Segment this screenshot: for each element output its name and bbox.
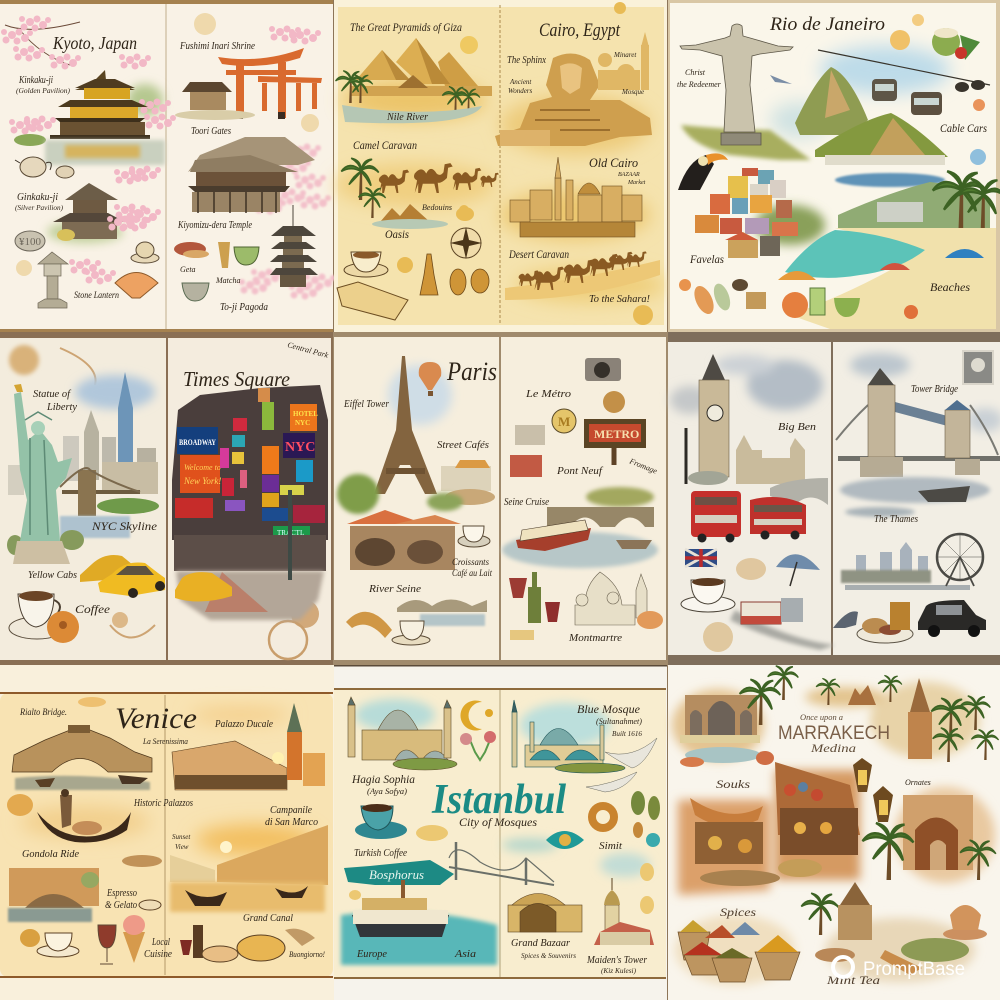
icon: crescent moon and star — [460, 700, 493, 731]
panel: Istanbul — [334, 665, 667, 1000]
icon: Nile River — [342, 105, 482, 123]
label: Local Cuisine: Local — [151, 937, 170, 948]
icon: stone lantern — [38, 252, 68, 308]
panel: Venice — [0, 665, 334, 1000]
label: Ornates: Ornates — [905, 778, 931, 787]
icon: metro sign — [584, 391, 646, 465]
icon: coffee and donut — [9, 591, 79, 643]
taxi — [175, 572, 232, 602]
icon: 100 yen coin: ¥100 — [19, 236, 42, 248]
sign: Hotel NYC: NYC — [295, 419, 310, 427]
icon: market scene — [801, 882, 872, 940]
label: Fromage: Fromage — [627, 456, 659, 476]
label: Kinkaku-ji — [16, 75, 71, 95]
label: Desert Caravan: Desert Caravan — [508, 247, 569, 261]
label: Grand Canal: Grand Canal — [243, 913, 293, 924]
icon: Ginkaku-ji silver pavilion — [47, 183, 161, 243]
label: Spices: Spices — [720, 905, 756, 919]
icon: Houses of Parliament — [688, 435, 805, 485]
icon: torii gates — [218, 48, 322, 119]
label: Ancient Wonders: Ancient — [509, 78, 532, 86]
icon: metro M medallion: M — [558, 414, 570, 429]
icon: 100 yen coin — [15, 231, 45, 251]
icon: street wash — [730, 610, 835, 650]
label: Statue of Liberty — [33, 389, 78, 413]
icon: salad and bread — [880, 938, 969, 975]
icon: palm grove — [931, 696, 999, 762]
label: Statue of Liberty: Statue of — [33, 389, 71, 400]
icon: coconut — [932, 28, 980, 60]
icon: camera — [585, 358, 621, 381]
icon: tagine teapot — [943, 905, 987, 940]
icon: geta sandals — [174, 242, 209, 258]
label: River Seine: River Seine — [368, 584, 422, 595]
icon: coffee stain bottom — [703, 622, 733, 652]
icon: souk stall right — [775, 762, 860, 855]
label: Le Metro: Le Métro — [525, 389, 571, 400]
icon: Blue Mosque — [512, 700, 625, 773]
icon: floral splash — [637, 611, 663, 629]
watermark: PromptBase — [833, 957, 965, 980]
icon: Old Cairo city — [510, 157, 642, 237]
icon: Maiden's Tower — [594, 878, 654, 945]
icon: river bank — [841, 570, 970, 590]
icon: souk stall left — [695, 822, 763, 864]
icon: tea bowl — [182, 283, 209, 301]
icon: cup and saucer — [392, 621, 430, 645]
label: Kinkaku-ji: Kinkaku-ji — [18, 75, 53, 86]
icon: pink blossom sprig — [69, 258, 116, 284]
icon: folding fan — [115, 272, 158, 298]
icon: favela houses — [695, 168, 825, 258]
icon: flip-flops — [690, 281, 733, 317]
label: Maiden's Tower: Maiden's Tower — [586, 955, 647, 966]
panel: New York — [0, 332, 333, 666]
label: Seine Cruise: Seine Cruise — [504, 497, 549, 508]
icon: Kiyomizu-dera temple — [188, 137, 315, 213]
label: Espresso & Gelato: Espresso — [106, 888, 137, 899]
text: Paris title: Paris — [446, 357, 497, 386]
icon: cherry branch right — [269, 26, 321, 44]
label: Historic Palazzos: Historic Palazzos — [133, 798, 193, 809]
icon: tulips — [460, 731, 496, 760]
icon: London Eye — [937, 534, 983, 586]
label: Grand Bazaar: Grand Bazaar — [511, 938, 570, 949]
icon: matcha bowl — [234, 247, 259, 265]
label: Camel Caravan: Camel Caravan — [353, 138, 417, 152]
icon: pagoda — [270, 205, 318, 287]
icon: mask — [122, 855, 162, 867]
sign: Welcome to New York: Welcome to — [184, 463, 221, 472]
label: Kinkaku-ji: (Golden Pavilion) — [16, 87, 71, 95]
label: Europe, Asia: Europe — [356, 949, 388, 960]
illustration: Times Square street — [172, 385, 328, 620]
icon: Eiffel Tower — [374, 356, 437, 494]
icon: matcha whisk — [218, 242, 230, 268]
sign: Broadway: BROADWAY — [179, 438, 216, 447]
icon: ferry — [352, 880, 449, 937]
icon: Campanile tower — [272, 703, 325, 786]
sign: NYC — [283, 433, 315, 458]
label: Hagia Sophia: (Aya Sofya) — [367, 787, 407, 796]
icon: Koutoubia tower — [908, 678, 932, 759]
text: Istanbul title: Istanbul — [431, 777, 566, 823]
label: Statue of Liberty: Liberty — [46, 402, 78, 413]
icon: riad courtyard — [680, 695, 774, 767]
icon: parchment scroll — [337, 282, 408, 320]
label: Blue Mosque: (Sultanahmet) — [596, 717, 642, 726]
panel: Kyoto, Japan — [0, 0, 336, 333]
panel: Rio de Janeiro — [668, 0, 1000, 332]
label: Central Park: Central Park — [286, 340, 330, 360]
label: Espresso & Gelato — [105, 888, 137, 911]
icon: desert caravan — [505, 251, 660, 300]
label: Local Cuisine — [144, 937, 173, 960]
icon: Turkish coffee cup — [355, 804, 407, 839]
label: Bazaar Market — [618, 172, 646, 186]
icon: hanging lanterns — [853, 758, 893, 822]
label: Espresso & Gelato: & Gelato — [105, 900, 137, 911]
sign: NYC: NYC — [285, 440, 315, 455]
icon: full English breakfast — [857, 618, 913, 643]
sign: Hotel NYC — [290, 404, 318, 431]
icon: Thames water — [840, 477, 990, 517]
icon: pint of beer — [890, 602, 910, 630]
icon: metro M medallion — [552, 409, 576, 433]
icon: Westminster bridge — [770, 478, 828, 505]
icon: hot-air balloon — [419, 362, 441, 396]
label: Simit: Simit — [599, 841, 622, 852]
icon: pigeon — [833, 611, 858, 628]
icon: street kiosk and scooter — [510, 425, 545, 477]
panel: Cairo, Egypt — [334, 0, 667, 334]
icon: Doge's Palace — [172, 741, 287, 790]
icon: Thames tour boat — [918, 486, 970, 502]
label: Campanile di San Marco — [265, 805, 318, 828]
label: Europe, Asia: Asia — [454, 949, 476, 960]
icon: food and wine table — [180, 925, 315, 962]
icon: Tower Bridge — [836, 368, 1000, 477]
sign: Hotel NYC: HOTEL — [293, 410, 318, 418]
icon: sky wash — [388, 365, 452, 425]
icon: wine glass — [98, 925, 116, 964]
label: Maiden's Tower: (Kiz Kulesi) — [601, 967, 637, 975]
icon: coffee and sundae — [20, 929, 79, 957]
icon: lamp post — [684, 428, 688, 484]
icon: Rialto Bridge — [12, 725, 152, 790]
text: Medina: Medina — [810, 741, 856, 755]
icon: small shrine — [175, 82, 255, 120]
icon: beach umbrellas — [778, 249, 984, 280]
icon: oasis palms — [341, 158, 430, 222]
label: Buongiorno: Buongiorno! — [289, 950, 325, 959]
label: Ginkaku-ji — [15, 192, 64, 212]
label: Hagia Sophia — [351, 772, 415, 796]
icon: stains — [16, 13, 319, 276]
icon: simit — [592, 806, 614, 828]
icon: Seine water — [502, 532, 658, 568]
icon: trees — [337, 474, 463, 514]
label: Sunset View — [172, 833, 191, 851]
sign: Broadway — [177, 427, 218, 454]
icon: Sugarloaf mountains — [795, 67, 948, 165]
icon: Bosphorus Bridge — [449, 842, 554, 885]
icon: pyramids — [350, 38, 492, 96]
panel: Marrakech — [668, 665, 1000, 1000]
label: Blue Mosque — [577, 702, 642, 738]
label: Oasis: Oasis — [385, 227, 409, 241]
text: Marrakech subtitle: Once upon a — [800, 713, 843, 722]
sign: street sign: TRACTL — [277, 529, 304, 537]
pole — [288, 490, 292, 580]
icon: domed dish — [131, 242, 159, 263]
label: Gondola Ride: Gondola Ride — [22, 849, 80, 860]
icon: Sphinx — [495, 53, 652, 146]
icon: Christ the Redeemer — [680, 24, 793, 145]
label: Bazaar Market: BAZAAR — [618, 172, 640, 178]
icon: metro sign: METRO — [594, 427, 639, 441]
icon: Bosphorus banner — [344, 860, 454, 885]
label: Nile River: Nile River — [386, 112, 428, 123]
icon: Grand Canal buildings — [170, 825, 328, 912]
icon: compass — [450, 227, 482, 259]
label: Maiden's Tower — [586, 955, 647, 975]
icon: small plates — [815, 948, 855, 962]
label: To the Sahara: To the Sahara! — [589, 294, 650, 305]
icon: Big Ben — [699, 354, 729, 477]
icon: black cab — [918, 600, 986, 637]
icon: camel caravan — [379, 163, 499, 193]
icon: spice baskets — [678, 920, 800, 982]
label: Minaret, Mosque: Minaret — [613, 51, 637, 59]
icon: vintage coach — [741, 598, 803, 624]
sign: neon sign wall — [175, 418, 325, 523]
label: Tower Bridge: Tower Bridge — [911, 384, 958, 395]
icon: Pont Neuf bridge — [547, 487, 654, 527]
icon: Sacre-Coeur Montmartre — [575, 572, 647, 625]
label: Christ the Redeemer: Christ — [685, 68, 706, 77]
icon: oasis pond — [372, 219, 448, 229]
icon: beach sand — [790, 228, 996, 329]
label: Bedouins: Bedouins — [422, 203, 452, 212]
icon: Paris street buildings — [441, 460, 495, 505]
icon: palm by gate — [862, 823, 914, 880]
label: Blue Mosque: Blue Mosque — [577, 702, 641, 716]
label: Big Ben: Big Ben — [778, 422, 816, 433]
icon: gondola and gondolier — [37, 789, 131, 842]
panel: Paris — [333, 332, 668, 666]
text: Kyoto title: Kyoto, Japan — [52, 33, 137, 53]
icon: palms top — [740, 666, 902, 725]
icon: Seine cruise boat — [516, 520, 591, 551]
icon: small boat — [616, 540, 652, 549]
label: Croissants, Cafe au Lait: Café au Lait — [452, 568, 492, 578]
label: Fushimi Inari Shrine: Fushimi Inari Shrine — [179, 41, 255, 52]
icon: plum blossom sprig — [114, 166, 161, 184]
label: Rialto Bridge: Rialto Bridge. — [19, 707, 67, 717]
icon: cafe terrace — [347, 510, 461, 570]
label: The Thames: The Thames — [874, 514, 918, 525]
icon: coffee cup small — [139, 900, 161, 910]
icon: stains — [679, 14, 988, 312]
icon: Hagia Sophia — [348, 697, 457, 770]
icon: sunglasses — [955, 80, 985, 92]
icon: gondolas on Grand Canal — [185, 886, 308, 906]
label: Beaches: Beaches — [930, 280, 970, 294]
label: Minaret, Mosque: Mosque — [621, 88, 644, 96]
icon: evil eye — [546, 831, 584, 849]
icon: cable cars — [818, 50, 990, 115]
icon: cup — [458, 526, 490, 547]
watermark: PromptBase: PromptBase — [863, 959, 965, 980]
icon: seagulls — [586, 738, 657, 792]
icon: coffee stains — [9, 345, 319, 659]
label: Turkish Coffee: Turkish Coffee — [354, 848, 407, 859]
label: Ancient Wonders: Wonders — [508, 87, 533, 95]
icon: hillside under statue — [681, 125, 811, 160]
icon: red double-decker buses — [691, 491, 806, 542]
label: Croissants, Cafe au Lait — [452, 557, 492, 578]
label: Ginkaku-ji: (Silver Pavilion) — [15, 204, 64, 212]
label: Europe, Asia — [356, 949, 476, 960]
icon: yellow cabs — [80, 555, 165, 598]
icon: coffee cup — [344, 252, 388, 277]
text: Rio title: Rio de Janeiro — [769, 14, 885, 35]
label: Geta, Matcha, To-ji Pagoda: Geta — [180, 265, 196, 274]
icon: market awning — [690, 798, 763, 826]
icon: coffee cup — [681, 578, 735, 612]
icon: resort hills and palms — [838, 171, 1000, 232]
icon: tropical fruit and drinks — [732, 279, 918, 319]
label: Christ the Redeemer: the Redeemer — [677, 80, 722, 89]
icon: palm right — [960, 840, 996, 880]
icon: Brooklyn Bridge — [60, 468, 159, 538]
label: Pont Neuf: Pont Neuf — [556, 466, 603, 477]
text: Great Pyramids heading: The Great Pyramids of Giza — [350, 20, 462, 34]
label: Toori Gates: Toori Gates — [191, 126, 231, 137]
label: Cable Cars: Cable Cars — [940, 121, 987, 135]
label: Sunset View: View — [175, 843, 189, 851]
label: Geta, Matcha, To-ji Pagoda: To-ji Pagoda — [220, 302, 268, 313]
label: Geta, Matcha, To-ji Pagoda: Matcha — [215, 276, 240, 285]
label: Palazzo Ducale: Palazzo Ducale — [214, 719, 274, 730]
icon: Turkish lanterns — [631, 791, 660, 847]
label: Montmartre: Montmartre — [568, 633, 623, 644]
icon: wine and cheese — [509, 572, 560, 640]
icon: city skyline — [856, 542, 928, 580]
label: Blue Mosque: Built 1616 — [612, 730, 642, 738]
label: La Serenissima: La Serenissima — [142, 737, 188, 746]
label: Kiyomizu-dera Temple: Kiyomizu-dera Temple — [177, 220, 252, 231]
text: Cairo title: Cairo, Egypt — [539, 20, 621, 41]
icon: gelato cone — [123, 915, 145, 963]
icon: ocean — [785, 230, 925, 278]
icon: palm trees by the Nile — [336, 71, 480, 115]
icon: hookah and pots — [420, 254, 489, 295]
icon: distant kasbah — [848, 685, 876, 705]
label: Spices & Souvenirs: Spices & Souvenirs — [521, 952, 576, 960]
label: Hagia Sophia: Hagia Sophia — [351, 772, 415, 786]
icon: Union Jack — [685, 549, 717, 567]
icon: toucan — [678, 153, 728, 190]
label: Sunset View: Sunset — [172, 833, 191, 841]
wet street — [176, 571, 324, 620]
label: Bazaar Market: Market — [627, 180, 646, 186]
icon: teapot and bowl — [15, 157, 74, 178]
icon: Kinkaku-ji golden pavilion — [9, 70, 176, 165]
label: Stone Lantern: Stone Lantern — [74, 290, 119, 300]
sign: Welcome to New York — [180, 455, 221, 493]
sign: street sign — [273, 526, 310, 538]
icon: bay water — [835, 173, 945, 187]
icon: umbrella — [776, 554, 820, 586]
icon: croissant — [346, 612, 392, 638]
icon: Statue of Liberty — [7, 384, 84, 564]
icon: sea — [341, 912, 497, 965]
icon: NYC skyline — [8, 372, 158, 495]
icon: river bridge — [397, 600, 487, 626]
label: Favelas: Favelas — [689, 252, 724, 266]
label: Mint Tea: Mint Tea — [826, 973, 880, 987]
label: Geta, Matcha, To-ji Pagoda — [180, 265, 268, 313]
label: Yellow Cabs: Yellow Cabs — [28, 570, 77, 581]
crowd on street — [174, 535, 326, 571]
icon: coffee stain — [736, 558, 766, 580]
label: Local Cuisine: Cuisine — [144, 949, 173, 960]
icon: Grand Bazaar — [508, 894, 582, 932]
icon: market baskets — [700, 859, 822, 886]
label: Ginkaku-ji: Ginkaku-ji — [17, 192, 58, 203]
label: Street Cafes: Street Cafés — [437, 440, 489, 451]
text: City of Mosques subtitle: City of Mosques — [459, 815, 537, 829]
text: Venice title: Venice — [115, 702, 197, 735]
label: Coffee: Coffee — [75, 602, 111, 616]
icon: Bosphorus banner: Bosphorus — [369, 867, 424, 882]
label: Campanile di San Marco: Campanile — [270, 805, 313, 816]
label: Ancient Wonders — [508, 78, 533, 95]
text: Marrakech title: MARRAKECH — [778, 723, 890, 744]
icon: palace gate arch — [903, 795, 973, 870]
label: Minaret, Mosque — [613, 51, 644, 96]
icon: stains — [349, 825, 654, 914]
label: Christ the Redeemer — [677, 68, 722, 89]
label: Souks: Souks — [716, 777, 750, 791]
label: Old Cairo: Old Cairo — [589, 155, 638, 170]
sign: Welcome to New York: New York! — [183, 476, 221, 486]
icon: cherry branch top left — [1, 16, 151, 70]
icon: mosque and minaret — [598, 32, 649, 90]
icon: postage stamp — [963, 351, 993, 384]
label: Eiffel Tower: Eiffel Tower — [343, 399, 389, 410]
icon: Bridge of Sighs — [8, 868, 99, 922]
label: Croissants, Cafe au Lait: Croissants — [452, 557, 489, 567]
label: The Sphinx: The Sphinx — [507, 55, 546, 66]
label: Campanile di San Marco: di San Marco — [265, 817, 318, 828]
icon: cherry blossoms right — [239, 144, 336, 300]
panel: London — [668, 332, 1000, 666]
icon: sun — [460, 36, 478, 54]
icon: airplane — [770, 75, 792, 84]
label: NYC Skyline: NYC Skyline — [91, 519, 158, 533]
text: Times Square title: Times Square — [183, 367, 290, 391]
